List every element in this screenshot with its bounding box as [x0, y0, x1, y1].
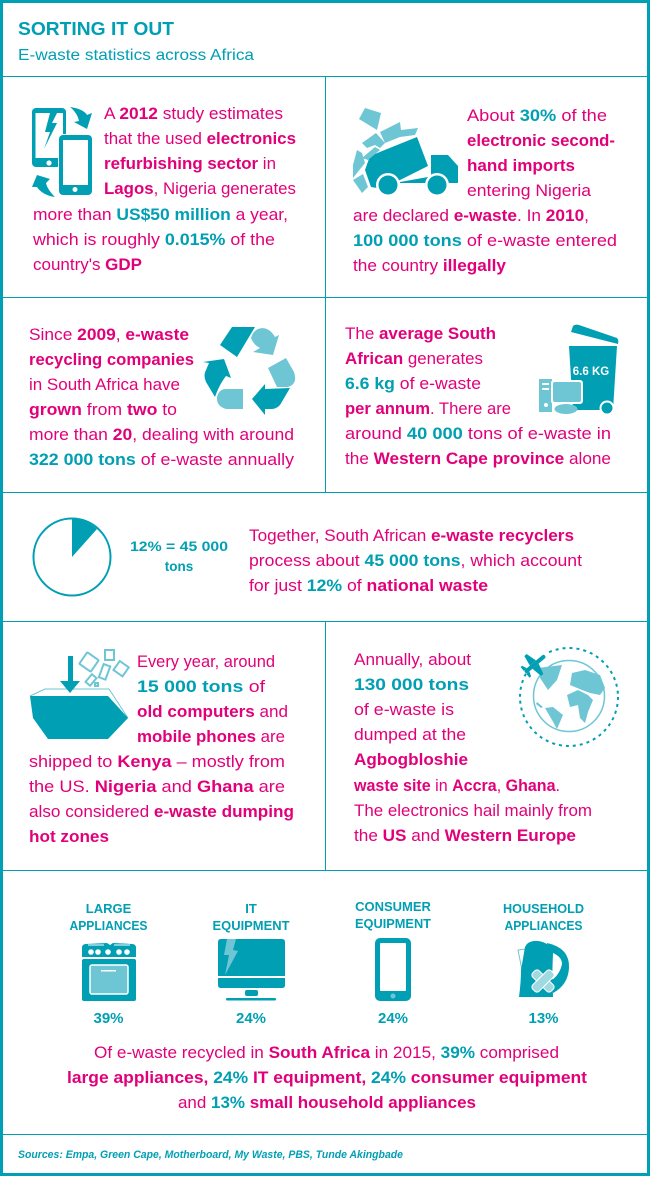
- text block: that the used electronics: [104, 129, 296, 148]
- text block: more than US$50 million a year,: [33, 205, 288, 224]
- text block: old computers and: [137, 702, 288, 721]
- summary text: [67, 1043, 587, 1112]
- icon: wheelie bin with computer: 6.6 KG: [573, 366, 609, 378]
- icon: wheelie bin with computer: [537, 325, 618, 416]
- panel: Western Cape: [326, 298, 647, 492]
- text block: also considered e-waste dumping: [29, 802, 294, 821]
- text block: 322 000 tons of e-waste annually: [29, 450, 295, 469]
- category: household appliances: [503, 901, 584, 1027]
- text block: grown from two to: [29, 400, 177, 419]
- panel: Agbogbloshie: [326, 622, 647, 870]
- text block: 130 000 tons: [354, 675, 469, 694]
- category: household appliances: HOUSEHOLD: [503, 901, 584, 916]
- summary text: and 13% small household appliances: [178, 1093, 476, 1112]
- text block: 15 000 tons of: [137, 677, 265, 696]
- text block: the US and Western Europe: [354, 826, 576, 845]
- text block: African generates: [345, 349, 483, 368]
- text block: process about 45 000 tons, which account: [249, 551, 582, 570]
- subtitle: E-waste statistics across Africa: [18, 47, 254, 64]
- panel: Nigeria imports: [326, 77, 647, 297]
- category: IT equipment: IT: [245, 901, 257, 916]
- category: IT equipment: [212, 901, 290, 1027]
- icon: cracked monitor: [218, 939, 285, 1000]
- text block: Annually, about: [354, 650, 471, 669]
- text block: mobile phones are: [137, 727, 285, 746]
- icon: swapping phones: [32, 107, 93, 197]
- text block: hot zones: [29, 827, 109, 846]
- text block: Together, South African e-waste recyclers: [249, 526, 574, 545]
- pie label: [130, 539, 228, 574]
- text block: Agbogbloshie: [354, 750, 468, 769]
- text block: The electronics hail mainly from: [354, 801, 592, 820]
- category: large appliances: APPLIANCES: [70, 918, 148, 933]
- text block: the country illegally: [353, 256, 507, 275]
- text block: hand imports: [467, 156, 575, 175]
- panel: recycled categories: [3, 871, 647, 1134]
- text block: per annum. There are: [345, 399, 511, 418]
- text block: shipped to Kenya – mostly from: [29, 752, 285, 771]
- category: household appliances: 13%: [528, 1010, 559, 1027]
- text block: [353, 106, 617, 275]
- category: IT equipment: 24%: [236, 1010, 266, 1027]
- text block: country's GDP: [33, 255, 142, 274]
- sources: Sources: Empa, Green Cape, Motherboard, My Waste, PBS, Tunde Akingbade: [18, 1149, 403, 1161]
- text block: the Western Cape province alone: [345, 449, 611, 468]
- summary text: large appliances, 24% IT equipment, 24% consumer equipment: [67, 1068, 587, 1087]
- summary text: Of e-waste recycled in South Africa in 2015, 39% comprised: [94, 1043, 559, 1062]
- category: consumer equipment: EQUIPMENT: [355, 916, 431, 931]
- pie chart: 12 percent: [34, 518, 110, 596]
- text block: refurbishing sector in: [104, 154, 276, 173]
- icon: globe and plane: [517, 646, 618, 746]
- icon: dump truck with debris: [353, 108, 458, 197]
- text block: [29, 325, 295, 469]
- text block: recycling companies: [29, 350, 194, 369]
- category: IT equipment: EQUIPMENT: [212, 918, 290, 933]
- pie label: tons: [165, 559, 193, 574]
- text block: of e-waste is: [354, 700, 454, 719]
- panel: national share: [3, 493, 647, 621]
- text block: are declared e-waste. In 2010,: [353, 206, 589, 225]
- text block: [345, 324, 611, 468]
- text block: Every year, around: [137, 652, 275, 671]
- text block: Since 2009, e-waste: [29, 325, 189, 344]
- text block: which is roughly 0.015% of the: [32, 230, 275, 249]
- text block: About 30% of the: [467, 106, 607, 125]
- panel: Lagos refurbishing: [3, 77, 325, 297]
- panel: South African recyclers: [3, 298, 325, 492]
- text block: entering Nigeria: [467, 181, 592, 200]
- icon: recycling arrows: [203, 327, 295, 415]
- category: household appliances: APPLIANCES: [504, 918, 583, 933]
- panel: Kenya dumping: [3, 622, 325, 870]
- text block: in South Africa have: [29, 375, 180, 394]
- category: large appliances: 39%: [93, 1010, 124, 1027]
- category: large appliances: [70, 901, 148, 1027]
- category: consumer equipment: 24%: [378, 1010, 408, 1027]
- text block: [32, 104, 296, 274]
- pie label: 12% = 45 000: [130, 539, 228, 554]
- icon: kettle with plaster: [518, 941, 569, 999]
- category: consumer equipment: CONSUMER: [355, 899, 432, 914]
- text block: A 2012 study estimates: [104, 104, 283, 123]
- text block: electronic second-: [467, 131, 615, 150]
- category: large appliances: LARGE: [86, 901, 132, 916]
- text block: 6.6 kg of e-waste: [345, 374, 481, 393]
- text block: waste site in Accra, Ghana.: [353, 776, 560, 795]
- text block: around 40 000 tons of e-waste in: [345, 424, 611, 443]
- category: consumer equipment: [355, 899, 432, 1027]
- text block: [353, 650, 592, 845]
- icon: smartphone: [375, 938, 411, 1001]
- text block: 100 000 tons of e-waste entered: [353, 231, 617, 250]
- header panel: [3, 3, 647, 76]
- title: SORTING IT OUT: [18, 19, 174, 39]
- text block: dumped at the: [354, 725, 466, 744]
- text block: Lagos, Nigeria generates: [104, 179, 296, 198]
- icon: skip with falling devices: [30, 650, 129, 739]
- text block: the US. Nigeria and Ghana are: [29, 777, 285, 796]
- text block: [249, 526, 582, 595]
- text block: [29, 652, 294, 846]
- text block: for just 12% of national waste: [249, 576, 488, 595]
- text block: The average South: [345, 324, 496, 343]
- icon: oven: [82, 943, 136, 1001]
- text block: more than 20, dealing with around: [29, 425, 294, 444]
